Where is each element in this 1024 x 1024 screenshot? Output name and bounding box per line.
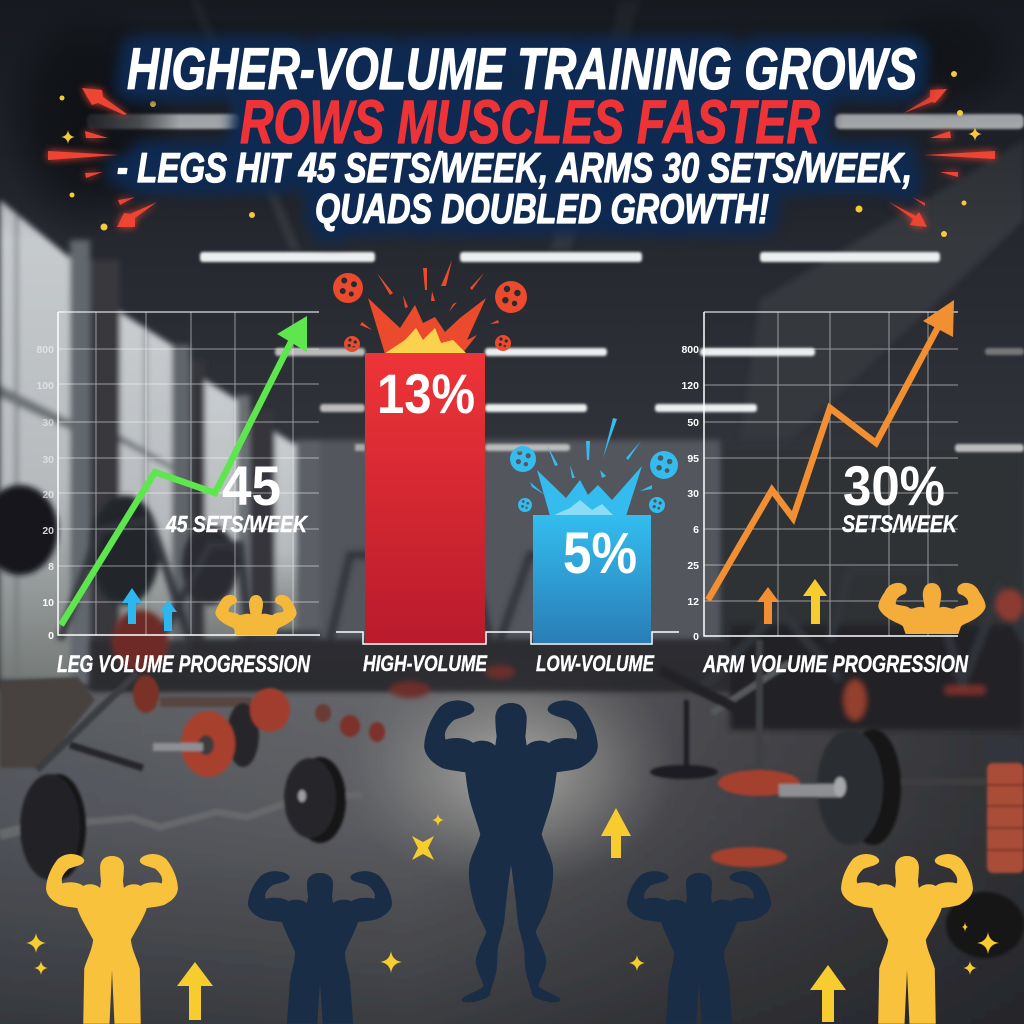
arm chart y labels: 0 xyxy=(693,631,699,643)
figure: right navy xyxy=(627,871,771,1024)
leg value callout: 45 SETS/WEEK xyxy=(165,511,308,537)
soft corner shade right xyxy=(860,0,1024,120)
title: ROWS MUSCLES FASTER xyxy=(240,88,820,156)
arm chart y labels: 95 xyxy=(687,453,699,465)
low-volume label: LOW-VOLUME xyxy=(536,651,655,676)
arm chart y labels: 6 xyxy=(693,524,699,536)
soft corner shade left xyxy=(0,0,180,240)
icon: muscle bust xyxy=(878,583,986,634)
leg chart grid xyxy=(58,312,320,635)
leg chart y labels: 8 xyxy=(48,561,54,573)
arm value callout: 30% xyxy=(843,454,945,517)
blue explosion xyxy=(510,418,678,516)
ceiling beams xyxy=(190,0,1024,440)
decorative bursts beside title xyxy=(48,71,995,237)
high-volume label: HIGH-VOLUME xyxy=(363,651,488,676)
leg chart y labels: 20 xyxy=(42,525,54,537)
red arrows and streaks xyxy=(48,88,995,227)
leg chart y labels: 20 xyxy=(42,489,54,501)
arm chart y labels xyxy=(681,344,699,643)
leg chart y labels: 100 xyxy=(36,380,54,392)
chart: high vs low volume bars xyxy=(333,260,679,676)
leg value callout: 45 xyxy=(222,454,281,517)
leg chart y labels: 800 xyxy=(36,344,54,356)
arm value callout: SETS/WEEK xyxy=(842,511,958,538)
windows on the left wall xyxy=(0,200,320,685)
leg value callout xyxy=(165,454,308,537)
distant equipment xyxy=(0,485,1024,730)
icon: blue up arrows xyxy=(122,588,177,631)
back wall xyxy=(320,440,720,640)
figure: left yellow xyxy=(46,854,178,1024)
bar value 5%: 5% xyxy=(563,521,637,586)
leg chart y labels: 30 xyxy=(42,417,54,429)
arm chart y labels: 50 xyxy=(687,417,699,429)
figure: left navy xyxy=(248,871,392,1024)
arm chart y labels: 800 xyxy=(681,344,699,356)
chart: leg volume progression xyxy=(36,312,320,678)
bar value 13%: 13% xyxy=(377,362,475,425)
icon: muscle bust xyxy=(215,595,297,635)
leg chart y labels: 30 xyxy=(42,454,54,466)
arm chart y labels: 30 xyxy=(687,488,699,500)
title xyxy=(117,37,917,233)
barbells and plates xyxy=(0,640,1024,958)
orange trend arrow xyxy=(708,300,954,600)
bar baseline xyxy=(336,632,679,644)
blue bar xyxy=(533,515,651,643)
top shade xyxy=(0,0,1024,240)
figures: flexing silhouettes xyxy=(46,700,973,1024)
red bar xyxy=(365,353,485,643)
icons: yellow up arrows xyxy=(177,808,846,1022)
arm chart y labels: 120 xyxy=(681,380,699,392)
title: QUADS DOUBLED GROWTH! xyxy=(315,185,769,233)
icon: orange and yellow up arrows xyxy=(757,579,827,624)
arm chart y labels: 12 xyxy=(687,596,699,608)
gym floor xyxy=(0,650,1024,1024)
green trend arrow xyxy=(61,316,307,625)
arm chart y labels: 25 xyxy=(687,560,699,572)
icons: yellow sparkles xyxy=(26,814,999,975)
red explosion xyxy=(333,260,527,354)
leg chart label: LEG VOLUME PROGRESSION xyxy=(57,651,310,678)
arm chart grid xyxy=(704,312,958,636)
figure: right yellow xyxy=(841,854,973,1024)
yellow sparkles around title xyxy=(60,71,982,237)
figure: centre navy xyxy=(424,700,598,1002)
chart: arm volume progression xyxy=(681,300,986,678)
leg chart y labels: 10 xyxy=(42,597,54,609)
ceiling lights xyxy=(87,114,1024,452)
leg chart y labels: 0 xyxy=(48,630,54,642)
leg chart y labels xyxy=(36,344,54,642)
